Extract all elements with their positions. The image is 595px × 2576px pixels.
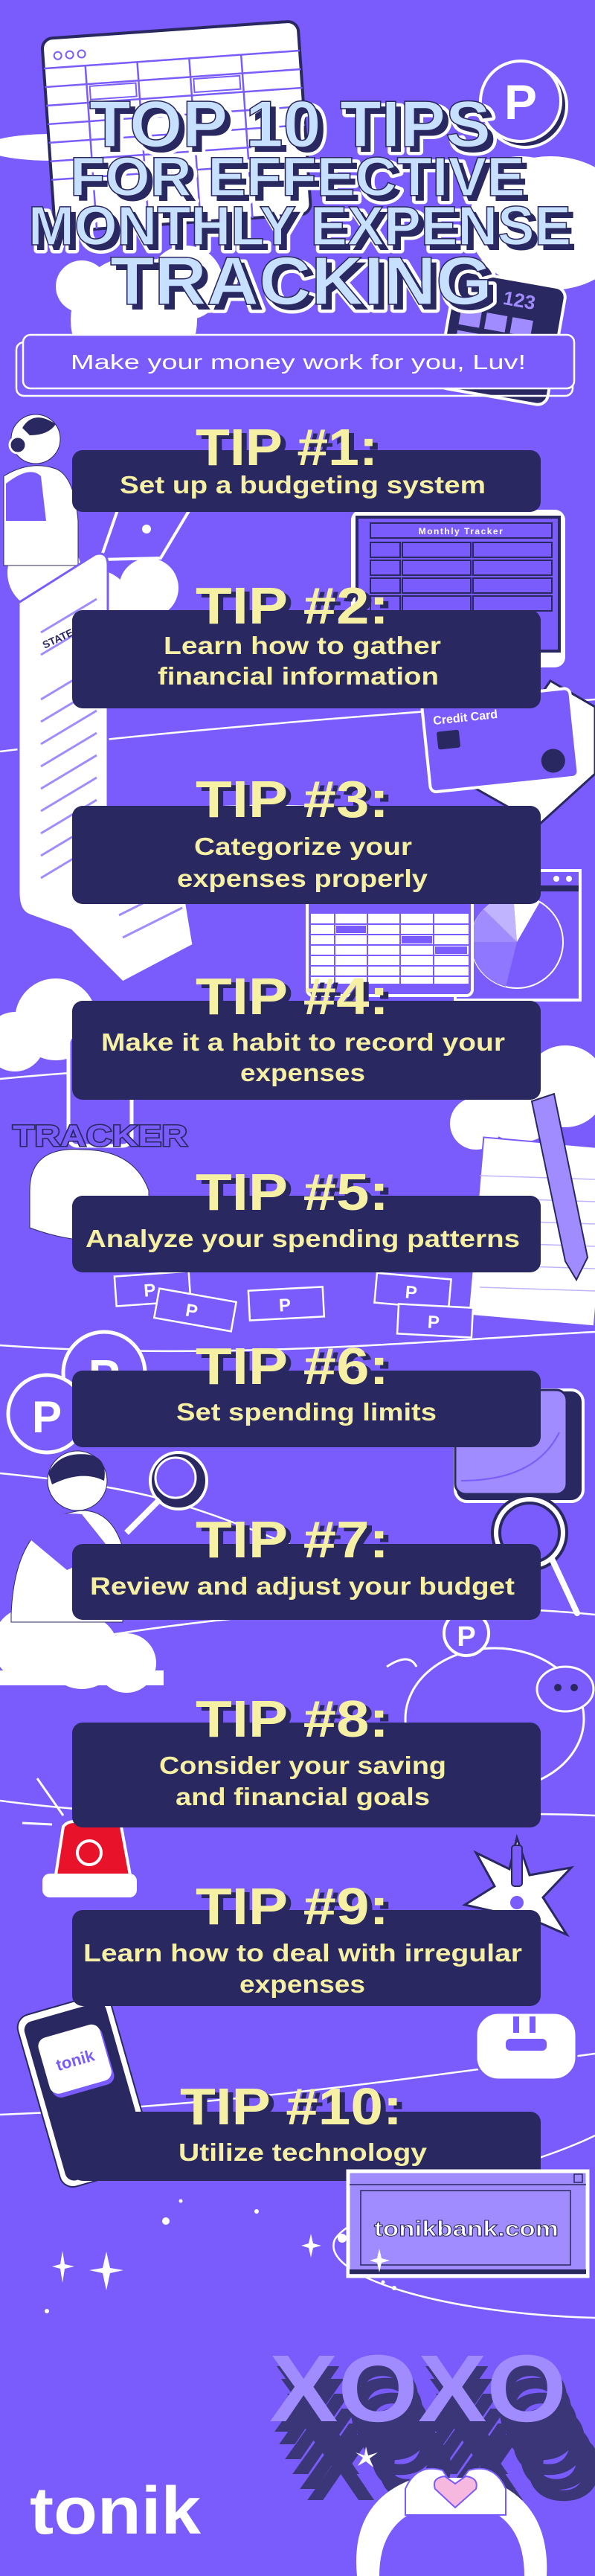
- icon: peso coin top: [480, 61, 567, 147]
- tip 3: expenses properly: [177, 865, 428, 892]
- title: TRACKING: [115, 249, 498, 324]
- illustration: credit card: [422, 681, 595, 824]
- tip 5: [72, 1163, 541, 1272]
- tip 8: TIP #8:: [201, 1694, 394, 1752]
- title: MONTHLY EXPENSE: [33, 200, 576, 262]
- illustration: tonik phone: [14, 1992, 157, 2190]
- illustration: credit card: Credit Card: [432, 708, 498, 728]
- icon: magnifier right: [496, 1499, 577, 1613]
- tip 10: TIP #10:: [185, 2081, 408, 2139]
- tip 2: TIP #2:: [196, 577, 389, 635]
- illustration: top clouds: [0, 134, 595, 383]
- tip 6: Set spending limits: [176, 1398, 437, 1426]
- tip 4: TIP #4:: [201, 971, 394, 1029]
- tip 4: Make it a habit to record your: [101, 1028, 505, 1056]
- tip 2: TIP #2:: [201, 580, 394, 638]
- tip 10: Utilize technology: [178, 2138, 428, 2166]
- illustration: tracker phone: TRACKER: [13, 1120, 187, 1153]
- tip 4: [72, 967, 541, 1100]
- tip 9: [72, 1877, 541, 2006]
- tip 2: Learn how to gather: [164, 632, 441, 659]
- illustration: money bills: P: [278, 1295, 292, 1316]
- tip 1: Set up a budgeting system: [120, 471, 486, 499]
- illustration: pencil and notebook: [468, 1094, 595, 1326]
- XOXO: XOXO: [278, 2359, 576, 2465]
- title: [28, 87, 576, 324]
- tip 9: TIP #9:: [201, 1881, 394, 1939]
- illustration: tracker phone: [13, 1034, 187, 1241]
- tonikbank.com window: [348, 2171, 588, 2276]
- illustration: heart hands: [356, 2447, 547, 2576]
- illustration: money bills: P: [405, 1282, 418, 1303]
- tip 1: TIP #1:: [196, 418, 378, 476]
- XOXO: XOXO: [274, 2346, 571, 2452]
- tip 10: TIP #10:: [180, 2077, 402, 2136]
- illustration: clouds middle: [0, 978, 595, 1150]
- illustration: small spreadsheet: [307, 899, 472, 996]
- tip 9: expenses: [239, 1970, 365, 1998]
- illustration: spreadsheet window: [42, 21, 311, 232]
- tonikbank.com window: tonikbank.com: [374, 2217, 559, 2241]
- tip 9: Learn how to deal with irregular: [83, 1939, 522, 1967]
- tip 8: TIP #8:: [196, 1690, 389, 1748]
- icon: exclamation starburst: [465, 1838, 571, 1942]
- XOXO: XOXO: [292, 2388, 589, 2495]
- illustration: pie chart window: [455, 871, 580, 1000]
- tip 1: TIP #1:: [201, 422, 383, 480]
- logo: tonik: tonik: [30, 2474, 202, 2548]
- illustration: money bills: P: [427, 1312, 440, 1333]
- illustration: calculator: [436, 269, 567, 406]
- title: FOR EFFECTIVE: [75, 151, 530, 213]
- illustration: person with magnifier: [0, 1451, 207, 1693]
- title: TRACKING: [110, 243, 492, 319]
- subtitle box: Make your money work for you, Luv!: [71, 350, 526, 374]
- XOXO: XOXO: [269, 2336, 567, 2442]
- icon: peso coins left: P: [89, 1350, 120, 1403]
- illustration: monthly tracker tablet: [351, 510, 565, 667]
- tip 7: TIP #7:: [196, 1510, 389, 1569]
- XOXO: XOXO: [284, 2374, 582, 2480]
- title: TOP 10 TIPS: [94, 92, 496, 166]
- tip 4: TIP #4:: [196, 967, 389, 1025]
- XOXO: XOXO: [306, 2415, 595, 2521]
- tip 6: [72, 1337, 541, 1447]
- tip 2: financial information: [158, 662, 439, 690]
- illustration: statement paper roll: STATEMENT: [41, 614, 102, 651]
- tip 6: TIP #6:: [196, 1337, 389, 1395]
- tip 7: TIP #7:: [201, 1514, 394, 1572]
- icon: peso coins left: P: [32, 1392, 62, 1442]
- tip 10: [72, 2077, 541, 2181]
- illustration: person with headphones and laptop: [4, 414, 192, 651]
- title: FOR EFFECTIVE: [70, 146, 525, 208]
- icon: smiley: [476, 2013, 576, 2080]
- tip 2: [72, 577, 541, 708]
- illustration: tonik phone: tonik: [54, 2045, 97, 2074]
- icon: peso coin top: P: [504, 74, 537, 129]
- illustration: money bills: P: [143, 1281, 156, 1301]
- tip 7: Review and adjust your budget: [90, 1572, 515, 1600]
- tip 3: TIP #3:: [196, 770, 389, 828]
- tip 3: Categorize your: [194, 833, 412, 860]
- title: TOP 10 TIPS: [89, 87, 491, 161]
- illustration: piggy bank: P: [457, 1621, 476, 1653]
- illustration: wallet: [455, 1390, 583, 1502]
- illustration: piggy bank: [387, 1611, 594, 1790]
- tip 4: expenses: [240, 1059, 365, 1086]
- illustration: statement paper roll: [19, 554, 193, 982]
- tip 3: [72, 770, 541, 904]
- tip 5: TIP #5:: [201, 1167, 394, 1225]
- XOXO: XOXO: [299, 2403, 595, 2510]
- tip 6: TIP #6:: [201, 1341, 394, 1399]
- tip 8: [72, 1690, 541, 1827]
- illustration: money bills: P: [184, 1300, 199, 1322]
- tip 5: Analyze your spending patterns: [86, 1225, 520, 1252]
- illustration: money bills: [115, 1272, 473, 1338]
- tip 7: [72, 1510, 541, 1620]
- tip 8: and financial goals: [176, 1783, 430, 1810]
- title: MONTHLY EXPENSE: [28, 195, 571, 257]
- subtitle box: [16, 335, 574, 396]
- illustration: calculator: 123: [501, 286, 537, 314]
- tip 3: TIP #3:: [201, 774, 394, 832]
- icon: peso coins left: [8, 1332, 145, 1452]
- tip 5: TIP #5:: [196, 1163, 389, 1221]
- tip 8: Consider your saving: [159, 1752, 446, 1779]
- illustration: monthly tracker tablet: Monthly Tracker: [419, 526, 504, 536]
- tip 1: [72, 418, 541, 512]
- icon: red siren: [22, 1771, 158, 1897]
- decorative sparkles: [45, 2199, 396, 2313]
- XOXO: [269, 2336, 595, 2521]
- tip 9: TIP #9:: [196, 1877, 389, 1935]
